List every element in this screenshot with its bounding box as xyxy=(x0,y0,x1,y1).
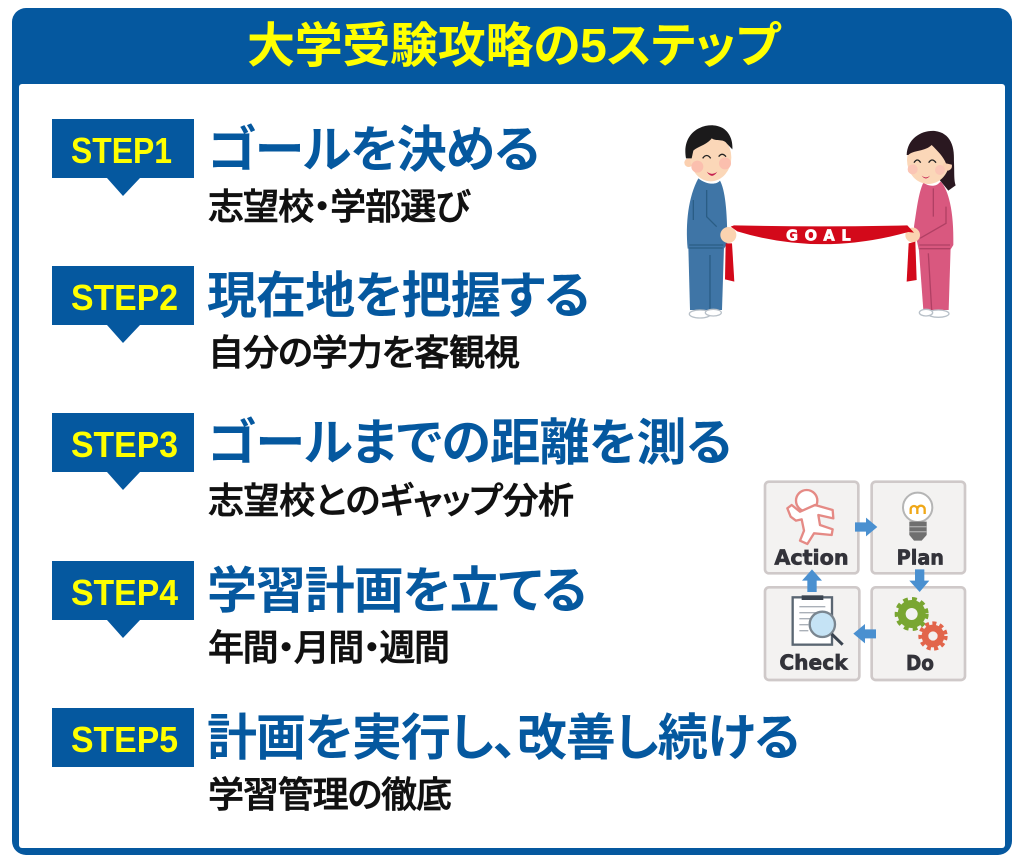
step 4 description: 年間・月間・週間 xyxy=(208,627,450,668)
arrow: Do to Check xyxy=(853,624,876,643)
tile: Check: Check xyxy=(779,650,849,674)
step 3 badge xyxy=(52,413,194,490)
arrow: Action to Plan xyxy=(855,518,877,536)
tile: Action xyxy=(765,482,858,573)
step 5 xyxy=(52,708,800,815)
step 4 badge: STEP4 xyxy=(71,572,178,613)
step 5 description: 学習管理の徹底 xyxy=(208,774,452,815)
illustration: two people holding goal banner xyxy=(684,125,956,318)
step 2 xyxy=(52,266,590,373)
step 1 badge xyxy=(52,119,194,196)
step 3 xyxy=(52,413,732,521)
step 1 badge: STEP1 xyxy=(71,130,172,171)
man xyxy=(684,125,736,318)
step 5 heading: 計画を実行し、改善し続ける xyxy=(207,710,800,766)
step 5 badge xyxy=(52,708,194,767)
title: 大学受験攻略の5ステップ xyxy=(247,20,782,73)
diagram: PDCA cycle xyxy=(765,482,965,680)
step 3 description: 志望校とのギャップ分析 xyxy=(208,480,574,521)
step 1 description: 志望校・学部選び xyxy=(208,186,471,227)
step 5 badge: STEP5 xyxy=(71,719,178,760)
step 1 heading: ゴールを決める xyxy=(207,122,540,178)
goal banner xyxy=(725,225,917,282)
woman xyxy=(905,131,956,317)
step 3 badge: STEP3 xyxy=(71,424,178,465)
step 3 heading: ゴールまでの距離を測る xyxy=(207,415,732,471)
step 4 badge xyxy=(52,561,194,638)
tile: Do: Do xyxy=(906,651,934,675)
step 2 badge xyxy=(52,266,194,343)
step 4 heading: 学習計画を立てる xyxy=(207,563,587,619)
tile: Plan: Plan xyxy=(897,546,944,570)
tile: Action: Action xyxy=(774,546,849,570)
step 4 xyxy=(52,561,587,668)
goal banner: GOAL xyxy=(786,228,851,245)
tile: Plan xyxy=(872,482,965,573)
tile: Check xyxy=(765,587,859,680)
step 2 heading: 現在地を把握する xyxy=(207,268,590,324)
arrow: Check to Action xyxy=(802,569,822,592)
tile: Do xyxy=(872,587,965,680)
arrow: Plan to Do xyxy=(909,569,929,592)
step 2 badge: STEP2 xyxy=(71,277,178,318)
step 1 xyxy=(52,119,540,227)
step 2 description: 自分の学力を客観視 xyxy=(208,332,520,373)
